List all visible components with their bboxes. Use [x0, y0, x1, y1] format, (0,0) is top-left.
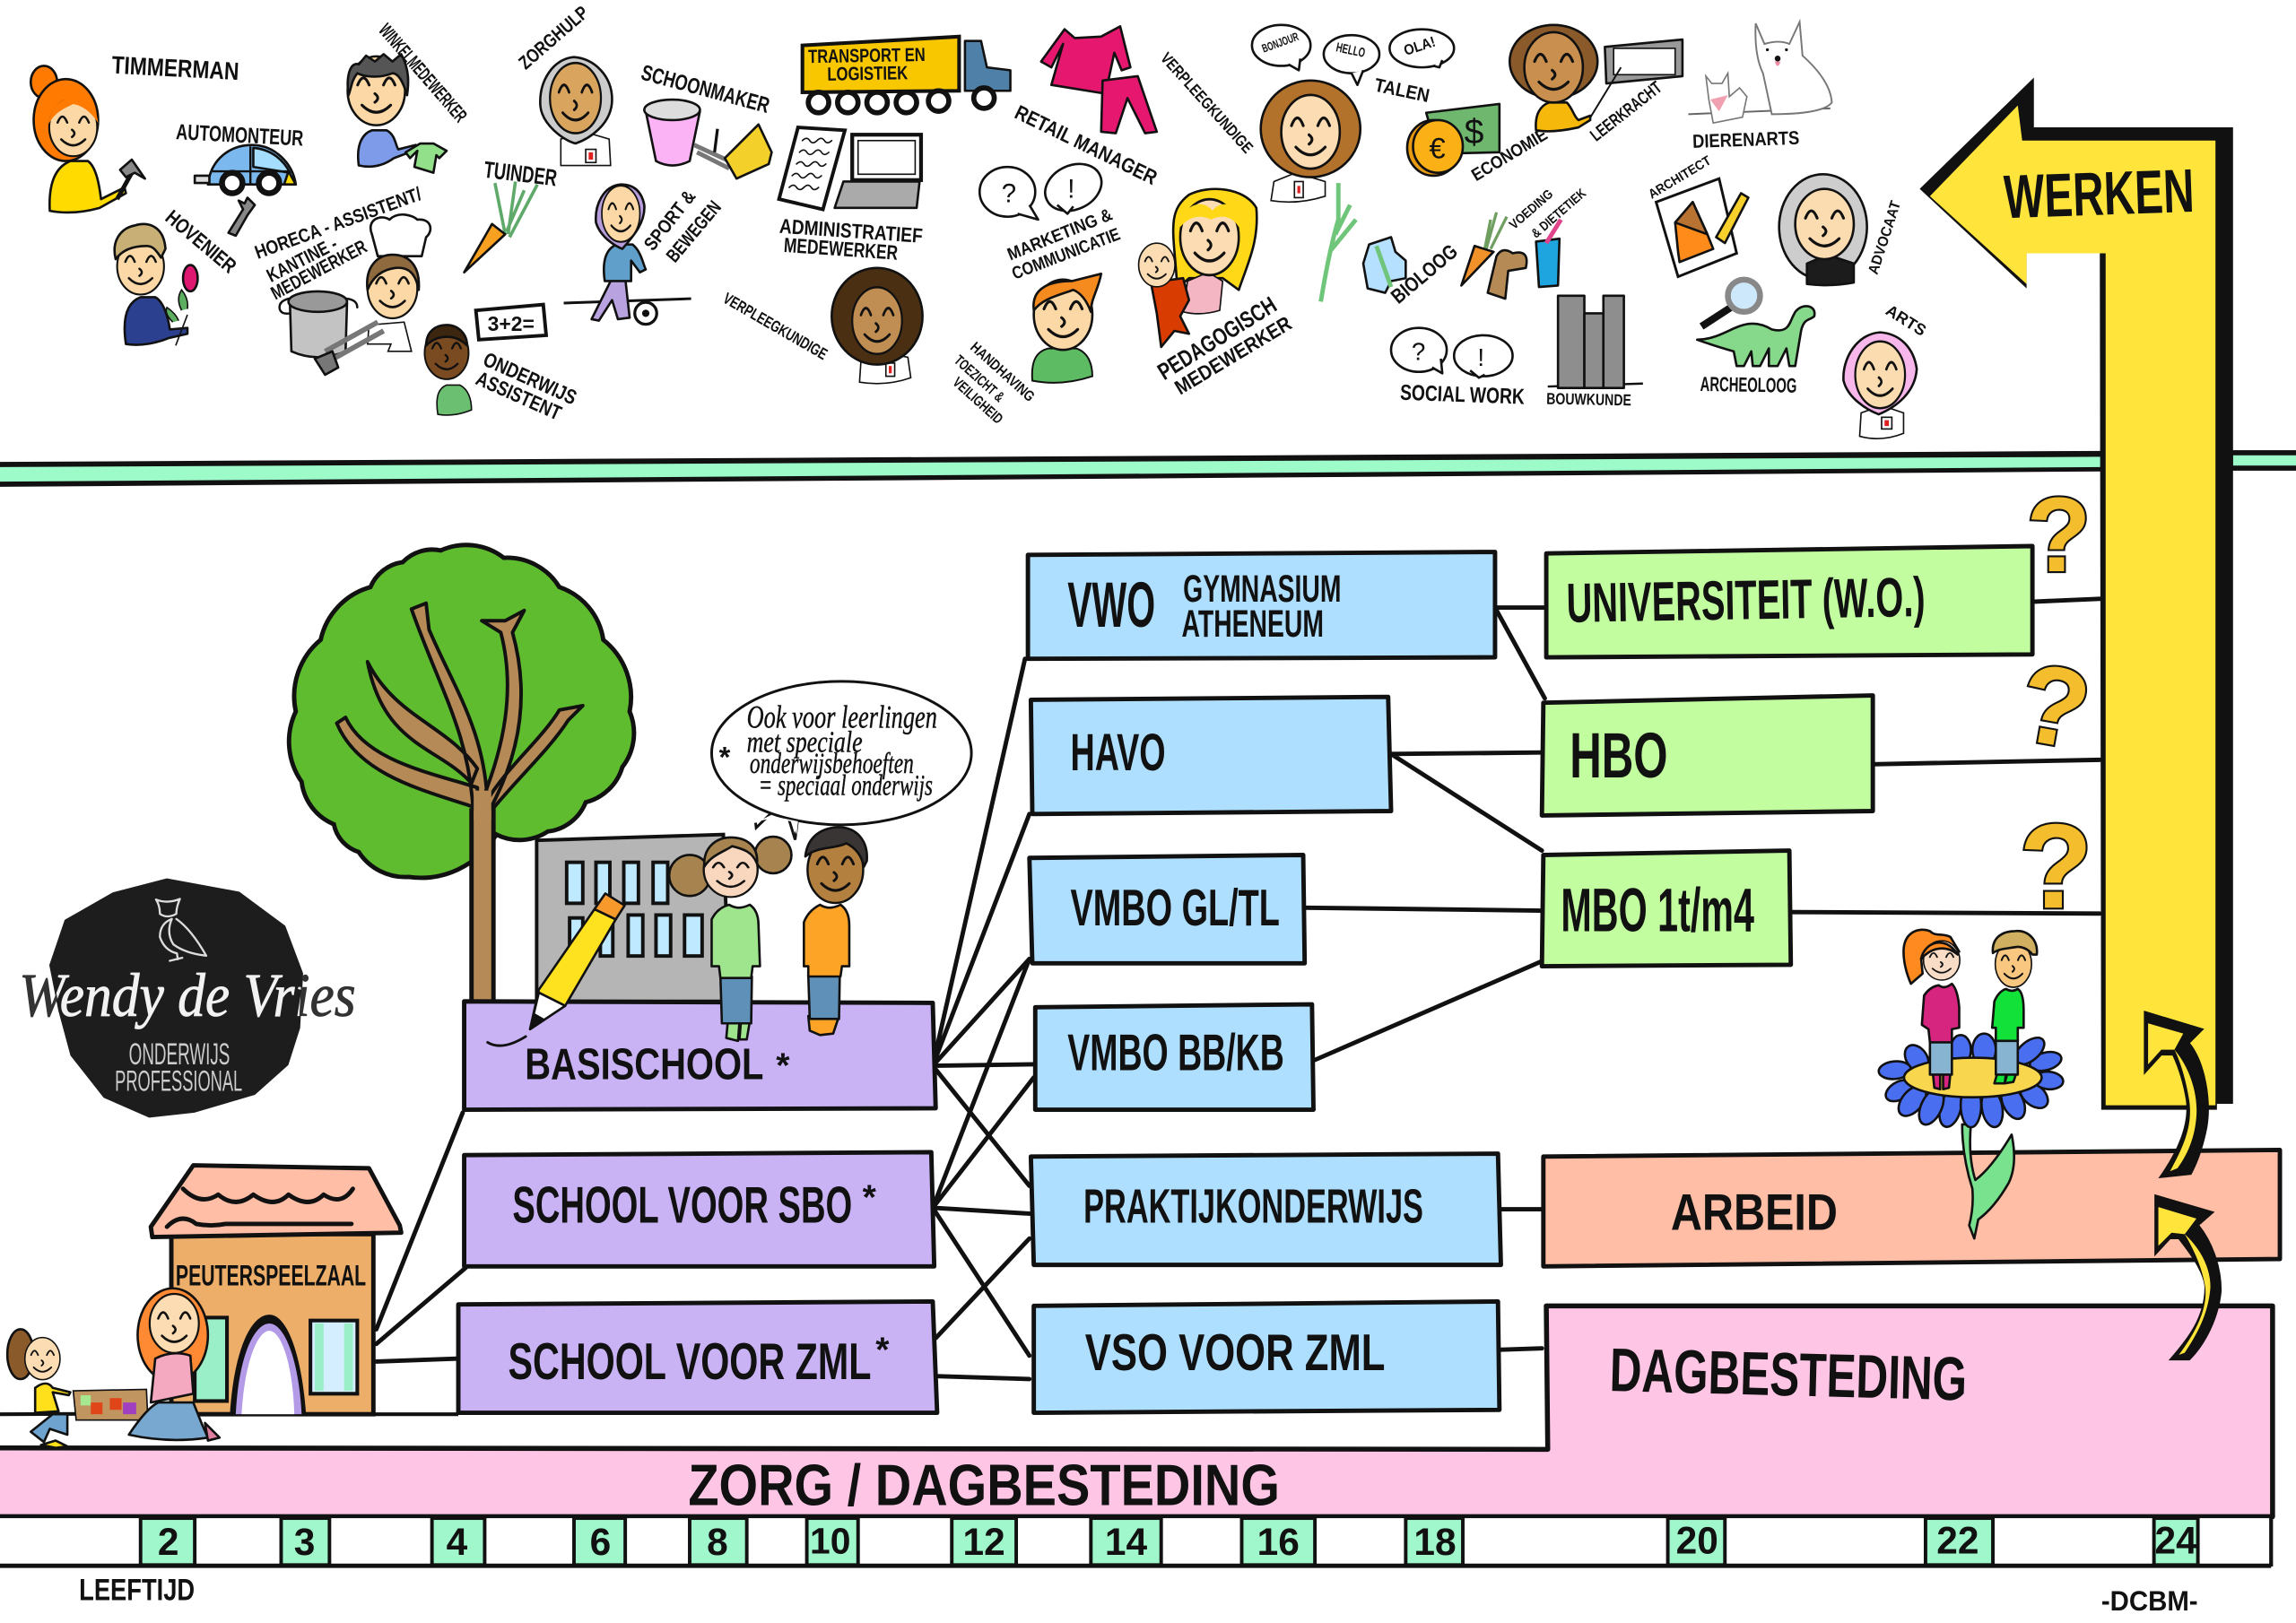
girl on flower [1903, 930, 1960, 1089]
cell 4 [432, 1518, 484, 1565]
figure: verpleegkundige rechts [1157, 49, 1361, 202]
label: MBO 1t/m4 [1561, 875, 1754, 944]
panel: vmbo gl/tl [1030, 855, 1305, 963]
label: HELLO [1335, 40, 1366, 61]
heading: werken: WERKEN [2003, 156, 2196, 231]
figure: onderwijsassistent [424, 305, 580, 425]
girl in green [669, 837, 791, 1041]
cell 6 [574, 1518, 625, 1565]
panel: hbo [1542, 696, 1873, 815]
figure: social work: ? [1412, 338, 1425, 366]
figure: architect [1646, 153, 1748, 277]
cell 16: 16 [1257, 1521, 1300, 1563]
figure: talen [1252, 25, 1454, 107]
label: SOCIAL WORK [1400, 381, 1525, 410]
icons: question marks [2010, 476, 2099, 933]
label: HAVO [1070, 724, 1166, 782]
figure: transport en logistiek [803, 37, 1011, 113]
label: TUINDER [483, 156, 559, 191]
panel: school voor zml [458, 1301, 937, 1413]
icons: question marks: ? [2019, 800, 2092, 933]
figure: economie: € [1429, 131, 1446, 164]
text: = speciaal onderwijs [759, 770, 933, 803]
label: COMMUNICATIE [1009, 224, 1123, 284]
timeline: leeftijd [0, 1516, 2271, 1567]
label: ARCHITECT [1646, 153, 1714, 202]
window left [195, 1317, 227, 1401]
arrow: dagbesteding naar arbeid [2155, 1195, 2221, 1359]
figure: dierenarts [1688, 22, 1831, 152]
label: TIMMERMAN [111, 51, 239, 85]
figure: hovenier [115, 205, 241, 345]
panel: havo [1031, 697, 1391, 814]
figure: economie: $ [1465, 113, 1484, 152]
text: Ook voor leerlingen [747, 699, 937, 734]
cell 14 [1091, 1518, 1161, 1565]
label: VSO VOOR ZML [1085, 1324, 1385, 1382]
figure: social work: ! [1477, 343, 1484, 371]
label: WINKELMEDEWERKER [374, 20, 471, 126]
label: ASSISTENT [473, 367, 565, 425]
cell 16 [1241, 1518, 1315, 1565]
figure: bioloog [1321, 183, 1462, 308]
figure: sport en bewegen [564, 185, 726, 325]
label: VMBO BB/KB [1067, 1024, 1284, 1081]
cell 4: 4 [447, 1521, 468, 1563]
cell 20: 20 [1676, 1519, 1718, 1561]
speech bubble [711, 681, 971, 840]
icons: question marks: ? [2010, 640, 2099, 774]
figure: advocaat [1779, 174, 1904, 285]
cell 8 [690, 1518, 747, 1565]
label: BASISCHOOL [525, 1040, 763, 1089]
icons: question marks: ? [2027, 476, 2091, 594]
figure: social work [1391, 328, 1525, 410]
figure: pedagogisch medewerker [1139, 189, 1296, 399]
label: VWO [1067, 569, 1155, 641]
figure: marketing en communicatie: ? [1002, 178, 1016, 208]
cell 10: 10 [810, 1520, 850, 1561]
figure: retail manager [1012, 26, 1161, 189]
cell 22: 22 [1936, 1519, 1979, 1561]
figure: schoonmaker [639, 61, 772, 178]
label: TOEZICHT & [951, 352, 1007, 405]
label: ARCHEOLOOG [1700, 372, 1797, 397]
figure: winkelmedewerker [348, 20, 471, 173]
cell 14: 14 [1105, 1521, 1148, 1563]
panel: arbeid [1544, 1150, 2280, 1266]
logo text: PROFESSIONAL [115, 1063, 242, 1097]
label: UNIVERSITEIT (W.O.) [1566, 567, 1926, 635]
label: HORECA - ASSISTENT/ [252, 184, 424, 264]
panel: school voor sbo [465, 1152, 935, 1266]
woman with red hair [129, 1289, 220, 1441]
label: ADMINISTRATIEF [778, 214, 924, 247]
boy in orange [804, 827, 867, 1035]
figure: zorghulp [515, 3, 612, 166]
cell 8: 8 [707, 1521, 728, 1563]
label: BIOLOOG [1387, 239, 1462, 308]
label: & DIETETIEK [1529, 187, 1589, 241]
label: LEERKRACHT [1587, 78, 1665, 145]
illustration: kinderen spelen [7, 1289, 220, 1448]
school building [536, 835, 729, 1002]
figure: horeca-assistent [252, 184, 430, 375]
pencil [488, 893, 624, 1046]
label: MEDEWERKER [267, 237, 370, 304]
label: GYMNASIUM [1183, 568, 1342, 610]
label: SCHOOL VOOR SBO [512, 1176, 852, 1234]
label: ARTS [1883, 301, 1929, 340]
cell 3: 3 [294, 1521, 315, 1563]
cell 18: 18 [1413, 1521, 1457, 1563]
panel: praktijkonderwijs [1031, 1154, 1500, 1265]
signature: -DCBM- [2101, 1585, 2198, 1617]
heading: dagbesteding: DAGBESTEDING [1609, 1335, 1968, 1413]
text: met speciale [747, 725, 863, 759]
label: AUTOMONTEUR [176, 120, 304, 152]
panel: vso voor zml [1034, 1301, 1500, 1413]
label: BONJOUR [1260, 30, 1300, 56]
label: arbeid: ARBEID [1671, 1184, 1838, 1241]
label: SCHOONMAKER [639, 61, 772, 118]
label: BEWEGEN [663, 197, 726, 266]
figure: bouwkunde [1546, 296, 1643, 409]
label: PEUTERSPEELZAAL [176, 1258, 366, 1291]
figure: tuinder [465, 156, 559, 273]
label: LOGISTIEK [827, 63, 909, 85]
asterisk: * [875, 1331, 890, 1369]
heading: zorg dagbesteding: ZORG / DAGBESTEDING [688, 1452, 1280, 1517]
label: HOVENIER [161, 205, 241, 278]
label: KANTINE - [264, 234, 341, 287]
label: 3+2= [488, 312, 535, 335]
cell 24: 24 [2155, 1519, 2197, 1561]
boy on flower [1992, 931, 2037, 1083]
cell 18 [1405, 1518, 1463, 1565]
arrow: arbeid naar werken [2144, 1011, 2208, 1177]
label: VOEDING [1507, 187, 1556, 232]
panel: universiteit [1546, 546, 2032, 657]
tree [289, 545, 634, 1002]
door arch [230, 1315, 306, 1414]
peuterspeelzaal [151, 1166, 401, 1414]
label: VEILIGHEID [950, 374, 1006, 428]
label: VMBO GL/TL [1070, 880, 1280, 937]
panel: vwo [1028, 552, 1495, 659]
cell 2 [141, 1518, 195, 1565]
cell 6: 6 [590, 1521, 611, 1563]
connection lines [377, 599, 2100, 1379]
cell 2: 2 [158, 1521, 179, 1563]
label: TRANSPORT EN [808, 45, 926, 67]
label: HBO [1570, 720, 1668, 792]
figure: leerkracht [1509, 25, 1683, 145]
cell 20 [1668, 1518, 1725, 1565]
label: PEDAGOGISCH [1152, 291, 1282, 386]
label: MEDEWERKER [1170, 311, 1296, 399]
panel: basisschool [465, 1002, 935, 1110]
illustration: bloem met kinderen [1878, 930, 2064, 1238]
label: SPORT & [640, 187, 700, 255]
label: TALEN [1372, 75, 1431, 107]
asterisk: * [776, 1047, 790, 1086]
label: leeftijd: LEEFTIJD [79, 1574, 195, 1608]
logo text: ONDERWIJS [129, 1037, 230, 1072]
asterisk: * [863, 1179, 877, 1218]
label: VERPLEEGKUNDIGE [1157, 49, 1257, 157]
logo: wendy de vries: Wendy de Vries [19, 961, 356, 1029]
label: ATHENEUM [1182, 603, 1324, 645]
figure: automonteur [176, 120, 304, 236]
panel: zorg en dagbesteding [0, 1306, 2273, 1517]
label: BOUWKUNDE [1546, 390, 1631, 409]
figure: verpleegkundige links [720, 268, 923, 384]
ground line [0, 1412, 458, 1415]
label: DIERENARTS [1692, 128, 1800, 152]
girl with ponytail [7, 1329, 70, 1448]
figure: timmerman [30, 51, 239, 213]
label: MARKETING & [1004, 204, 1115, 265]
illustration: kinderen op basisschool [488, 827, 867, 1046]
label: ECONOMIE [1468, 125, 1551, 186]
text: onderwijsbehoeften [750, 748, 914, 780]
figure: handhaving toezicht en veiligheid [950, 273, 1101, 428]
figure: archeoloog [1697, 280, 1814, 397]
panel: beroepen [30, 3, 1929, 438]
label: MEDEWERKER [783, 233, 899, 265]
cell 12: 12 [963, 1521, 1005, 1563]
logo: wendy de vries: Wendy de Vries [19, 961, 356, 1029]
label: RETAIL MANAGER [1012, 100, 1161, 189]
cell 22 [1926, 1518, 1993, 1565]
label: OLA! [1402, 34, 1438, 59]
figure: administratief medewerker [778, 127, 924, 265]
figure: arts [1843, 301, 1929, 438]
figure: voeding en dietetiek [1461, 187, 1589, 299]
label: SCHOOL VOOR ZML [509, 1333, 871, 1391]
divider band between work and education [0, 450, 2296, 487]
window right [310, 1321, 357, 1393]
panel: vmbo bb/kb [1035, 1004, 1313, 1110]
label: VERPLEEGKUNDIGE [720, 289, 831, 363]
cell 3 [281, 1518, 329, 1565]
label: ONDERWIJS [480, 347, 580, 409]
logo: wendy de vries [19, 880, 356, 1116]
cell 10 [807, 1518, 858, 1565]
label: PRAKTIJKONDERWIJS [1083, 1179, 1423, 1233]
figure: marketing en communicatie [979, 155, 1123, 284]
label: HANDHAVING [967, 339, 1038, 405]
cell 12 [952, 1518, 1016, 1565]
arrow: werken [1919, 78, 2233, 1110]
figure: economie [1407, 104, 1551, 186]
label: ADVOCAAT [1866, 199, 1904, 276]
asterisk: * [719, 741, 731, 774]
figure: marketing en communicatie: ! [1067, 174, 1074, 204]
panel: mbo [1542, 851, 1791, 967]
